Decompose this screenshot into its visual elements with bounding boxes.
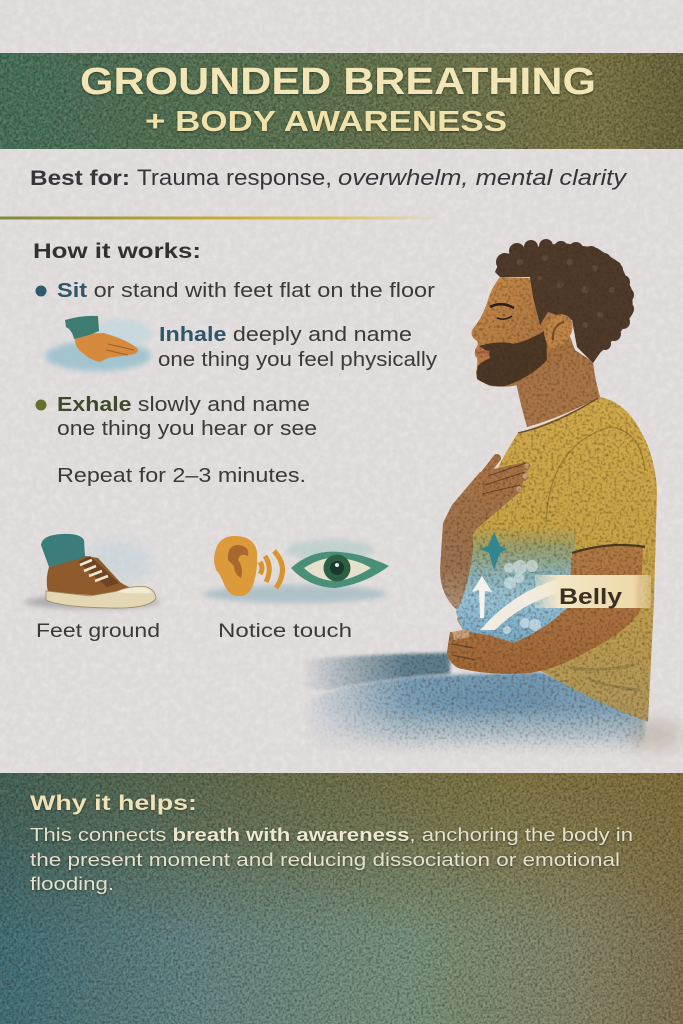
ear	[544, 314, 573, 349]
eye	[291, 552, 389, 588]
belly label	[535, 575, 651, 609]
arrow up	[472, 576, 492, 618]
hair	[495, 239, 634, 363]
panel: why it helps	[0, 773, 683, 1024]
title: GROUNDED BREATHING	[80, 61, 596, 103]
shirt	[457, 397, 657, 722]
step: exhale: one thing you hear or see	[57, 418, 317, 440]
icon: ear and eye	[203, 536, 389, 603]
why body text: flooding.	[30, 873, 114, 894]
why heading: Why it helps:	[30, 792, 197, 815]
belly breath area	[456, 525, 575, 646]
best for line: overwhelm, mental clarity	[338, 165, 628, 190]
best for line: Best for:	[30, 166, 130, 190]
step: exhale: Exhale slowly and name	[57, 394, 310, 416]
sound waves	[260, 551, 283, 588]
header banner	[0, 53, 683, 149]
step: inhale: one thing you feel physically	[158, 349, 437, 371]
icon: hand on ground	[45, 316, 152, 371]
face	[472, 277, 575, 387]
beard	[477, 330, 547, 386]
illustration: seated man	[300, 239, 683, 756]
front arm and hand on chest	[440, 458, 530, 610]
best for line: Trauma response,	[137, 165, 332, 190]
diamond marker	[480, 532, 507, 570]
belly swoosh	[480, 577, 570, 630]
why body text: the present moment and reducing dissociation or emotional	[30, 849, 620, 870]
step: inhale: Inhale deeply and name	[159, 324, 412, 346]
neck	[516, 340, 600, 427]
subtitle: + BODY AWARENESS	[145, 106, 507, 138]
rear arm and hand	[447, 546, 643, 674]
belly bubbles	[503, 560, 541, 634]
best for line	[30, 165, 628, 190]
icon: sneaker	[24, 534, 160, 609]
ear	[214, 536, 257, 596]
how it works heading: How it works:	[33, 240, 201, 263]
eye and brow	[490, 304, 514, 308]
step: exhale	[36, 394, 317, 440]
belly label: Belly	[559, 584, 623, 609]
why body text: This connects breath with awareness , anchoring the body in	[30, 824, 633, 845]
caption: notice touch: Notice touch	[218, 621, 352, 642]
panel: how it works	[33, 240, 437, 487]
step: sit: Sit or stand with feet flat on the floor	[57, 280, 435, 302]
step: inhale	[158, 324, 437, 371]
jeans	[300, 653, 645, 756]
why body text	[30, 824, 633, 894]
caption: feet ground: Feet ground	[36, 621, 160, 642]
step: repeat: Repeat for 2–3 minutes.	[57, 465, 306, 487]
